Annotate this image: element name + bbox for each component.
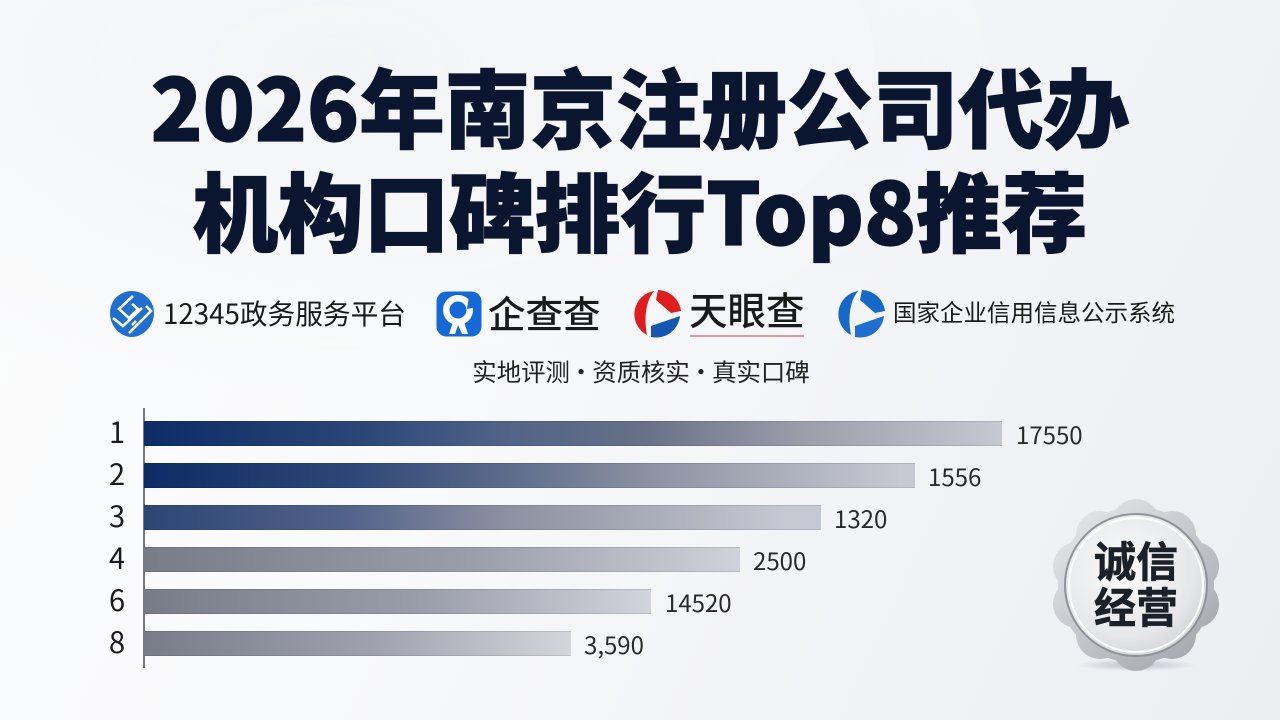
row 4 (109, 536, 806, 578)
row 1 (109, 410, 1083, 452)
row 1: 17550 (1016, 416, 1083, 451)
row 8: 3,590 (584, 626, 644, 661)
label: national credit system: 国家企业信用信息公示系统 (893, 294, 1175, 328)
row 2 (109, 452, 981, 494)
badge text: 经营 (1094, 575, 1178, 636)
label: tianyancha: 天眼查 (689, 281, 805, 337)
icon: qichacha (436, 292, 482, 336)
row 1: 1 (109, 410, 125, 452)
row 3 (109, 494, 887, 536)
title (151, 42, 1130, 270)
row 4: 2500 (753, 542, 806, 577)
bar chart (143, 408, 145, 668)
row 8 (109, 620, 644, 662)
icon: 12345 platform (110, 291, 154, 337)
tianyancha caption line (690, 335, 804, 337)
row 2: 1556 (928, 458, 981, 493)
axis line (143, 408, 144, 668)
label: 12345 platform: 12345政务服务平台 (163, 292, 406, 332)
row 3: 1320 (834, 500, 887, 535)
row 4: 4 (109, 536, 125, 578)
icon: tianyancha (634, 290, 681, 338)
title: 机构口碑排行Top8推荐 (193, 146, 1087, 270)
row 6 (109, 578, 732, 620)
row 6: 6 (109, 578, 125, 620)
row 8: 8 (109, 620, 125, 662)
label: qichacha: 企查查 (488, 284, 600, 339)
row 2: 2 (109, 452, 125, 494)
title: 2026年南京注册公司代办 (151, 42, 1129, 166)
badge: integrity seal (1053, 499, 1219, 671)
subtitle: 实地评测 · 资质核实 · 真实口碑 (472, 354, 810, 389)
badge text (1094, 529, 1178, 636)
row 6: 14520 (665, 584, 732, 619)
icon: national credit system (838, 290, 885, 338)
badge text: 诚信 (1094, 529, 1178, 590)
row 3: 3 (109, 494, 125, 536)
logo row (110, 281, 1175, 339)
